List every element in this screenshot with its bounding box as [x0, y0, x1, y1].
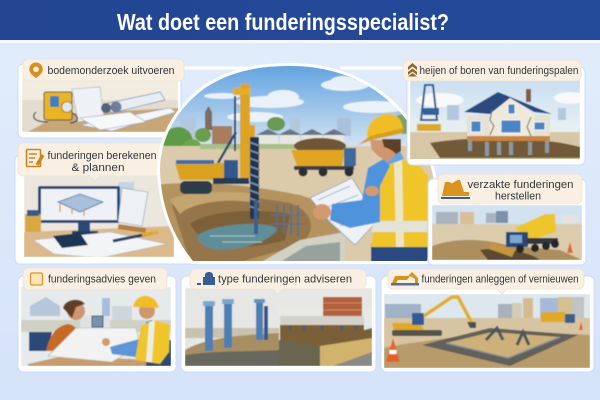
header banner [0, 0, 600, 43]
illustration: foundation types [185, 288, 372, 366]
ground [155, 146, 440, 266]
illustration: desk with computer [24, 176, 174, 258]
icon: excavator arm [392, 272, 418, 283]
skyline and houses [180, 106, 419, 144]
label: bodemonderzoek uitvoeren [48, 65, 174, 77]
label [190, 269, 366, 294]
panel: type funderingen adviseren [181, 269, 376, 372]
label: verzakte funderingen [468, 179, 574, 191]
panel: funderingen anleggen of vernieuwen [381, 269, 594, 372]
illustration: soil survey [22, 78, 178, 132]
label [438, 174, 582, 204]
icon: notebook [30, 273, 42, 285]
central scene [155, 60, 440, 270]
label [403, 60, 581, 81]
water pool [197, 224, 277, 250]
label: & plannen [72, 162, 124, 174]
panel: funderingsadvies geven [18, 268, 176, 372]
clouds [204, 76, 407, 122]
panel: bodemonderzoek uitvoeren [18, 59, 184, 138]
dump truck [291, 138, 356, 176]
label: funderingen anleggen of vernieuwen [422, 274, 578, 286]
illustration: excavation site [384, 294, 590, 368]
label [18, 143, 166, 181]
label [23, 59, 184, 81]
label: type funderingen adviseren [218, 274, 352, 286]
icon: location pin [29, 62, 43, 78]
worker with plans [310, 114, 430, 264]
panel: verzakte funderingen herstellen [428, 174, 586, 265]
title: Wat doet een funderingsspecialist? [117, 9, 449, 35]
panel: funderingen berekenen en plannen [15, 143, 200, 264]
label [23, 268, 167, 290]
label: funderingen berekenen [48, 150, 156, 162]
icon: trowel [442, 180, 469, 196]
illustration: consultation at a table [21, 287, 171, 366]
label: heijen of boren van funderingspalen [420, 65, 578, 77]
icon: padlock [197, 272, 215, 285]
trees [163, 126, 212, 147]
panel: heijen of boren van funderingspalen [403, 60, 586, 165]
icon: chevrons [408, 63, 417, 76]
reinforcement bars [270, 204, 305, 236]
drilling rig [175, 84, 260, 234]
label [388, 269, 584, 294]
label: herstellen [495, 190, 541, 202]
icon: notepad and pencil [26, 150, 43, 166]
label: funderingsadvies geven [48, 274, 156, 286]
connector frame [181, 66, 407, 70]
illustration: house on piles [410, 80, 586, 160]
concrete form [262, 232, 346, 261]
illustration: cement mixer [432, 205, 582, 260]
